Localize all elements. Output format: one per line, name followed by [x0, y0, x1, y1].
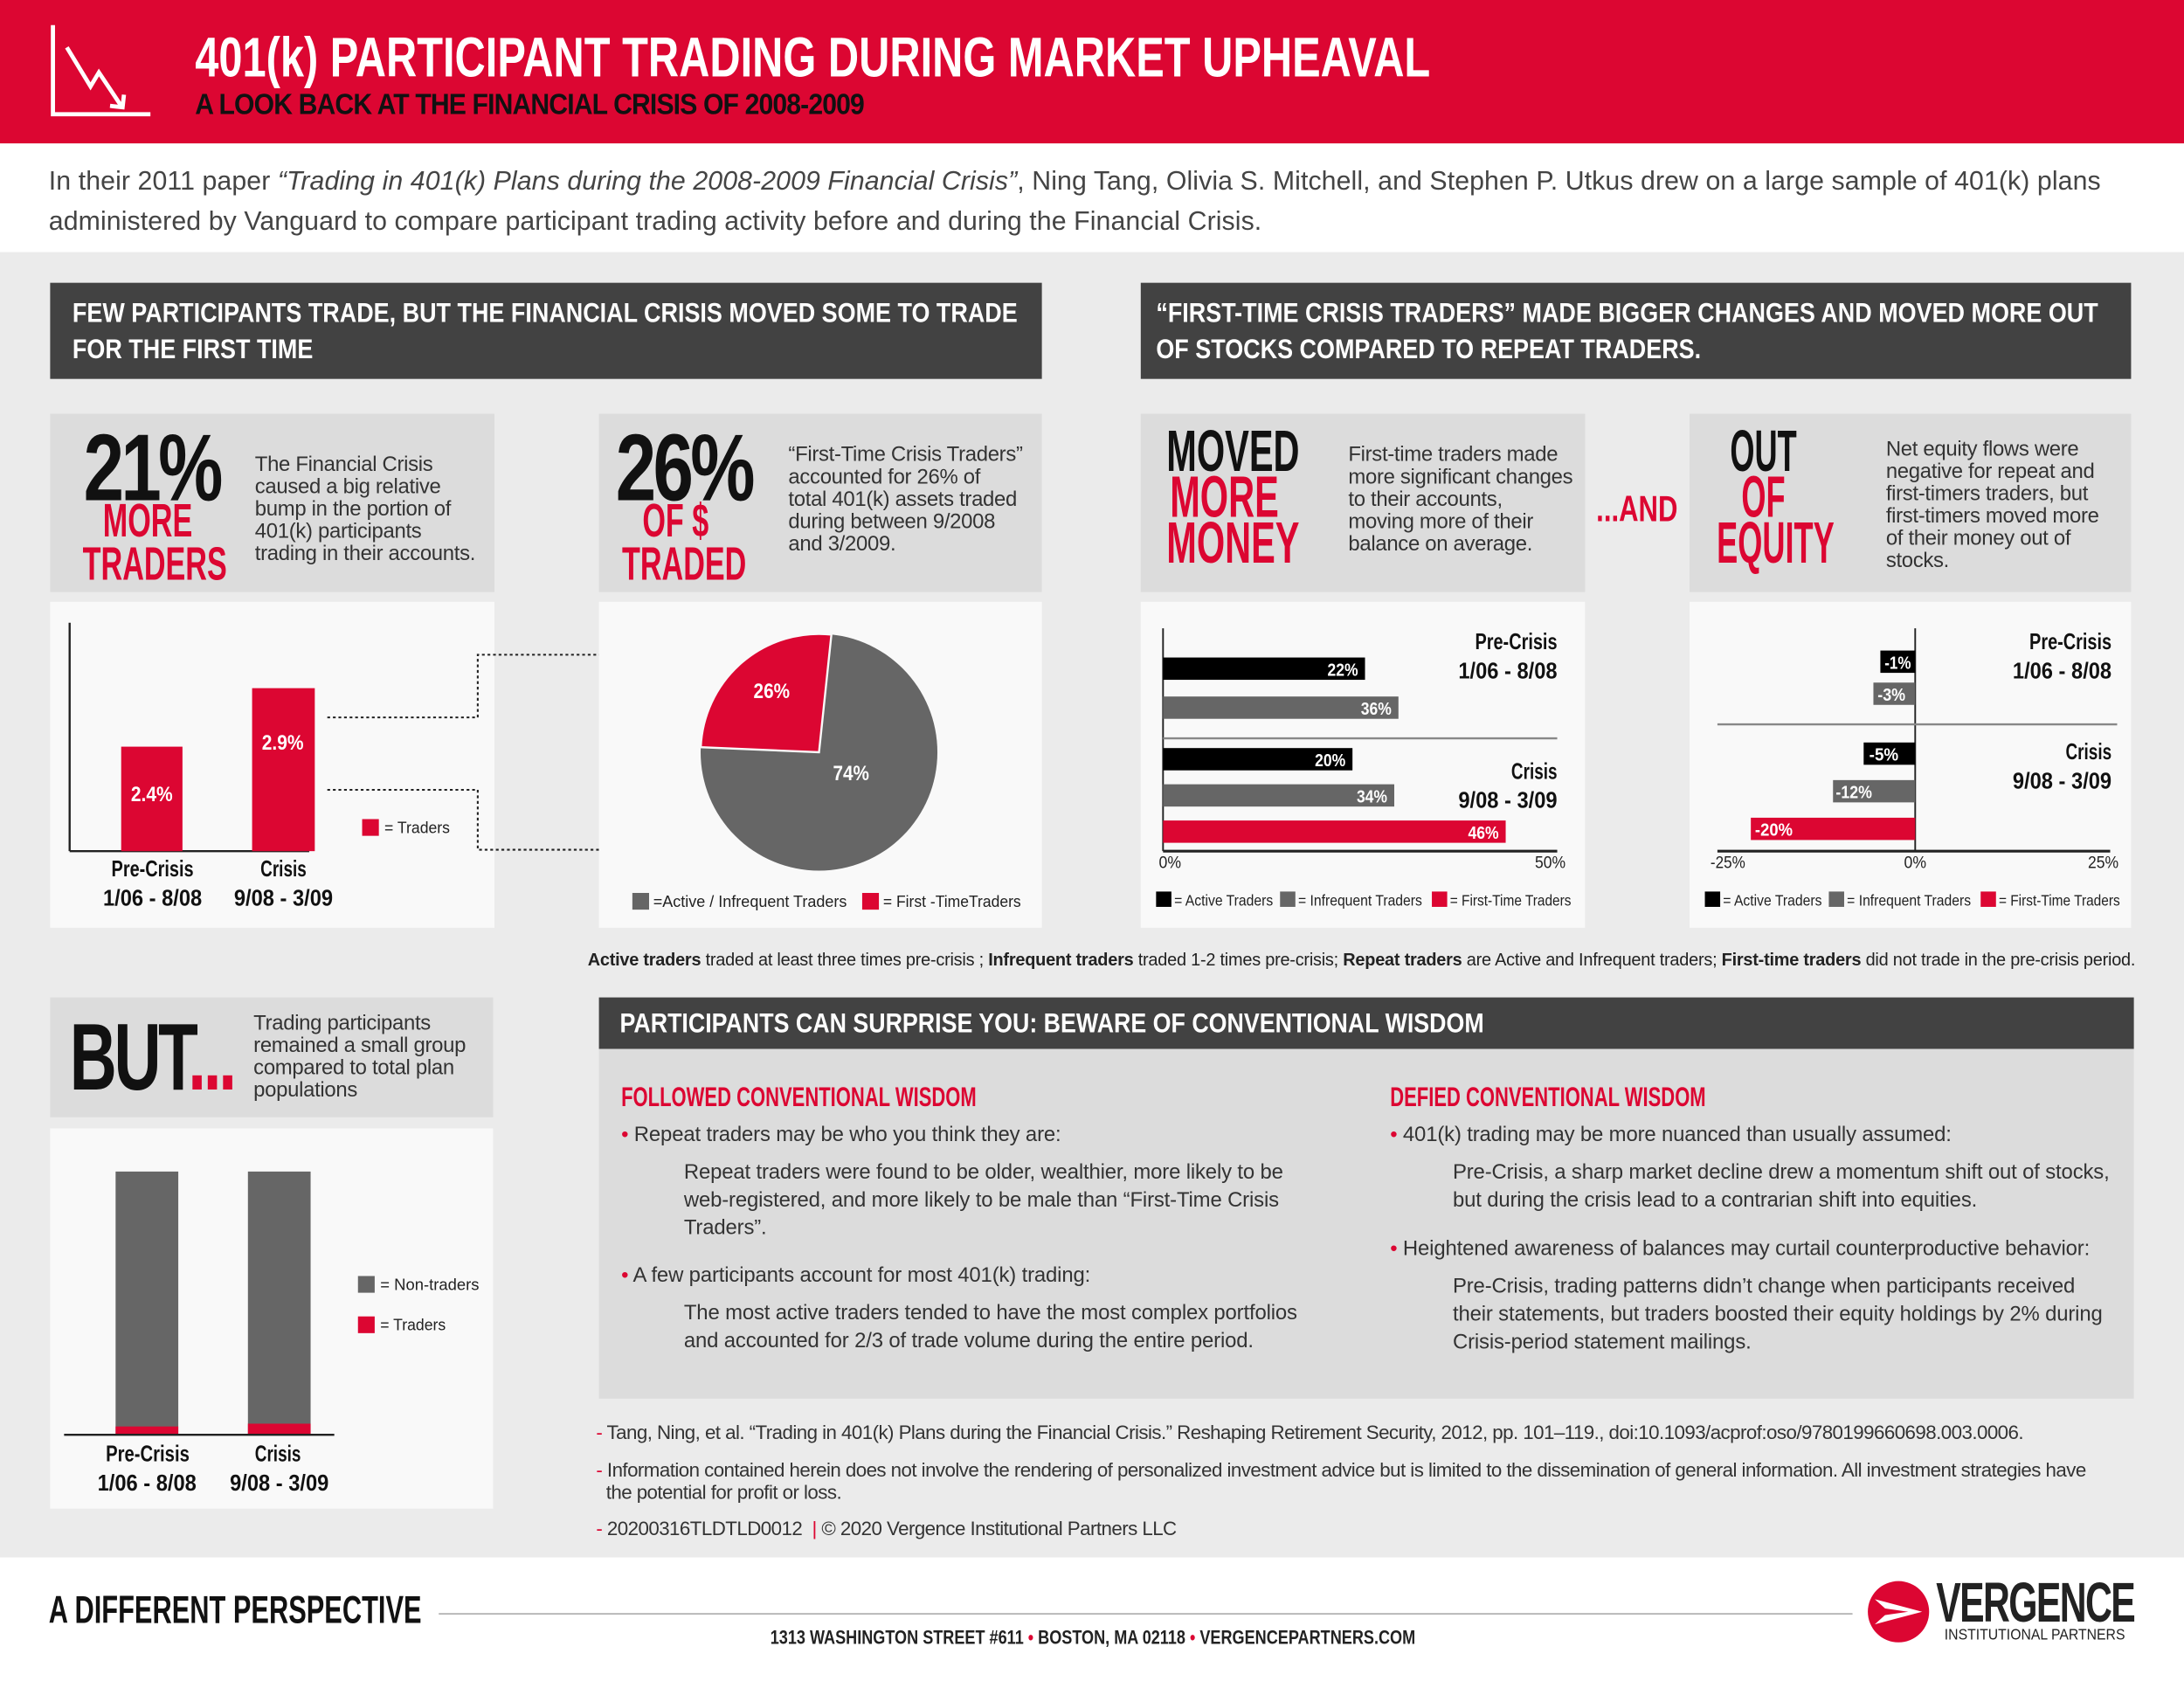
chart: traders vs non-traders: = Traders — [380, 1316, 446, 1334]
stat box: moved more money: moving more of their — [1348, 510, 1533, 534]
footnotes — [596, 1421, 2086, 1539]
column: followed conventional wisdom: Repeat traders were found to be older, wealthier, more likely to be — [684, 1160, 1283, 1184]
chart: moved more money horizontal bars: 36% — [1361, 699, 1392, 719]
intro text: In their 2011 paper “Trading in 401(k) Plans during the 2008-2009 Financial Crisis”, Ning Tang, Olivia S. Mitchell, and Stephen P. Utkus drew on a large sample of 401(k) plans — [49, 167, 2101, 197]
chart: pie of $ traded: 74% — [833, 762, 869, 785]
stat box: out of equity: first-timers moved more — [1886, 504, 2099, 528]
column: defied conventional wisdom: but during the crisis lead to a contrarian shift into equities. — [1453, 1188, 1977, 1212]
column: followed conventional wisdom: Traders”. — [684, 1216, 767, 1240]
chart: out of equity diverging bars: = Active Traders — [1723, 891, 1822, 909]
chart: pie of $ traded — [599, 602, 1042, 928]
section header left: FOR THE FIRST TIME — [73, 335, 313, 365]
stat box: 26% of $ traded: total 401(k) assets traded — [788, 488, 1017, 511]
chart: moved more money horizontal bars: 9/08 - 3/09 — [1458, 789, 1558, 813]
column: defied conventional wisdom: Pre-Crisis, trading patterns didn’t change when participants received — [1453, 1275, 2075, 1298]
header banner — [0, 0, 2184, 143]
chart: traders bar chart — [50, 602, 494, 928]
chart: traders bar chart: Pre-Crisis — [112, 857, 194, 882]
chart: moved more money horizontal bars: = First-Time Traders — [1450, 891, 1572, 909]
intro text: administered by Vanguard to compare participant trading activity before and during the Financial Crisis. — [49, 208, 1261, 237]
chart: traders bar chart: 1/06 - 8/08 — [103, 886, 202, 910]
subtitle: A LOOK BACK AT THE FINANCIAL CRISIS OF 2008-2009 — [195, 89, 864, 121]
dotted connector lines — [327, 654, 599, 851]
chart: out of equity diverging bars: -25% — [1711, 854, 1745, 872]
chart: moved more money horizontal bars: = Infrequent Traders — [1298, 891, 1422, 909]
chart: traders bar chart: 2.9% — [262, 731, 304, 755]
footnotes: - Information contained herein does not involve the rendering of personalized investment advice but is limited to the dissemination of general information. All investment strategies have — [596, 1458, 2086, 1481]
column: defied conventional wisdom: • Heightened awareness of balances may curtail counterproductive behavior: — [1390, 1237, 2090, 1261]
stat box: out of equity: Net equity flows were — [1886, 438, 2078, 461]
footer — [0, 1558, 2184, 1688]
stat box: 21% more traders: caused a big relative — [255, 475, 440, 499]
chart: out of equity diverging bars: -1% — [1884, 653, 1911, 673]
section header right: OF STOCKS COMPARED TO REPEAT TRADERS. — [1156, 335, 1701, 365]
chart: traders vs non-traders: 9/08 - 3/09 — [230, 1471, 328, 1496]
stat box: 26% of $ traded: TRADED — [622, 537, 746, 591]
stat box: moved more money — [1141, 414, 1585, 592]
stat box: 21% more traders: MORE — [103, 495, 192, 548]
logo: vergence — [1868, 1573, 2135, 1643]
logo: vergence: VERGENCE — [1936, 1573, 2134, 1634]
column: followed conventional wisdom: The most active traders tended to have the most complex portfolios — [684, 1301, 1297, 1325]
logo: vergence: INSTITUTIONAL PARTNERS — [1945, 1627, 2125, 1643]
section header right — [1141, 283, 2131, 379]
stat box: moved more money: MORE — [1170, 464, 1279, 529]
stat box: 26% of $ traded — [599, 414, 1042, 592]
column: followed conventional wisdom: web-registered, and more likely to be male than “First-Time Crisis — [684, 1188, 1279, 1212]
stat box: but...: populations — [253, 1078, 357, 1102]
column: followed conventional wisdom: and accounted for 2/3 of trade volume during the entire period. — [684, 1329, 1254, 1352]
stat box: out of equity — [1690, 414, 2131, 592]
column: followed conventional wisdom: • Repeat traders may be who you think they are: — [621, 1123, 1061, 1146]
stat box: but...: compared to total plan — [253, 1056, 454, 1080]
chart: moved more money horizontal bars: 34% — [1357, 786, 1387, 806]
chart: pie of $ traded: 26% — [754, 680, 790, 703]
text: ...and: ...AND — [1596, 488, 1677, 529]
chart: traders vs non-traders — [50, 1128, 493, 1509]
stat box: out of equity: negative for repeat and — [1886, 460, 2094, 483]
section header right: “FIRST-TIME CRISIS TRADERS” MADE BIGGER CHANGES AND MOVED MORE OUT — [1156, 298, 2098, 329]
chart: out of equity diverging bars: -3% — [1877, 685, 1905, 705]
stat box: 26% of $ traded: OF $ — [642, 495, 708, 548]
chart: traders bar chart: Crisis — [260, 857, 307, 882]
chart: moved more money horizontal bars: Pre-Crisis — [1475, 630, 1558, 654]
chart: moved more money horizontal bars: 22% — [1327, 660, 1358, 680]
stat box: moved more money: MONEY — [1166, 510, 1299, 575]
chart: out of equity diverging bars: 1/06 - 8/08 — [2013, 659, 2111, 683]
chart: moved more money horizontal bars: 0% — [1159, 854, 1181, 872]
chart: out of equity diverging bars: -20% — [1755, 820, 1793, 841]
stat box: 26% of $ traded: during between 9/2008 — [788, 510, 995, 534]
chart: traders vs non-traders: Pre-Crisis — [106, 1442, 190, 1467]
stat box: out of equity: stocks. — [1886, 549, 1949, 572]
chart: moved more money horizontal bars: 46% — [1468, 823, 1499, 843]
chart: pie of $ traded: = First -TimeTraders — [883, 892, 1021, 910]
stat box: out of equity: OUT — [1730, 418, 1797, 483]
column: defied conventional wisdom: DEFIED CONVENTIONAL WISDOM — [1390, 1083, 1706, 1113]
chart: out of equity diverging bars: = Infrequent Traders — [1847, 891, 1971, 909]
column: defied conventional wisdom: Crisis-period statement mailings. — [1453, 1331, 1752, 1354]
chart: traders vs non-traders: = Non-traders — [380, 1275, 479, 1293]
chart: moved more money horizontal bars: Crisis — [1511, 759, 1558, 784]
definitions note: Active traders traded at least three times pre-crisis ; Infrequent traders traded 1-2 times pre-crisis; Repeat traders are Active and Infrequent traders; First-time traders did not trade in the pre-crisis period. — [588, 950, 2135, 970]
chart: out of equity diverging bars: -5% — [1870, 745, 1898, 765]
section header: conventional wisdom — [599, 998, 2134, 1049]
stat box: out of equity: EQUITY — [1717, 510, 1835, 575]
chart: traders vs non-traders: Crisis — [255, 1442, 301, 1467]
panel: conventional wisdom content — [599, 1049, 2134, 1399]
chart: out of equity diverging bars — [1690, 602, 2131, 928]
chart: out of equity diverging bars: -12% — [1835, 783, 1872, 803]
column: defied conventional wisdom: Pre-Crisis, a sharp market decline drew a momentum shift out of stocks, — [1453, 1160, 2110, 1184]
stat box: but...: Trading participants — [253, 1012, 431, 1035]
stat box: moved more money: to their accounts, — [1348, 488, 1503, 511]
stat box: 21% more traders: TRADERS — [83, 537, 227, 591]
chart: traders bar chart: = Traders — [384, 818, 450, 836]
chart: traders bar chart: 2.4% — [131, 783, 173, 806]
stat box: moved more money: balance on average. — [1348, 532, 1532, 556]
chart: moved more money horizontal bars: 20% — [1315, 751, 1345, 771]
chart: out of equity diverging bars: 25% — [2088, 854, 2118, 872]
stat box: 21% more traders: trading in their accounts. — [255, 542, 475, 565]
stat box: out of equity: of their money out of — [1886, 527, 2070, 550]
stat box: out of equity: first-timers traders, but — [1886, 482, 2088, 506]
icon: declining chart — [51, 24, 150, 117]
column: followed conventional wisdom: • A few participants account for most 401(k) trading: — [621, 1263, 1090, 1287]
tagline: A DIFFERENT PERSPECTIVE — [49, 1588, 422, 1631]
stat box: moved more money: First-time traders made — [1348, 443, 1558, 467]
chart: out of equity diverging bars: Crisis — [2065, 740, 2111, 764]
footnotes: - Tang, Ning, et al. “Trading in 401(k) Plans during the Financial Crisis.” Reshaping Retirement Security, 2012, pp. 101–119., doi:10.1093/acprof:oso/9780199660698.003.0006. — [596, 1421, 2023, 1443]
chart: traders vs non-traders: 1/06 - 8/08 — [98, 1471, 197, 1496]
column: defied conventional wisdom: their statements, but traders boosted their equity holdings by 2% during — [1453, 1303, 2103, 1326]
address: 1313 WASHINGTON STREET #611 • BOSTON, MA 02118 • VERGENCEPARTNERS.COM — [771, 1626, 1415, 1648]
stat box: but...: remained a small group — [253, 1034, 466, 1057]
chart: moved more money horizontal bars: 1/06 - 8/08 — [1458, 659, 1558, 683]
column: defied conventional wisdom: • 401(k) trading may be more nuanced than usually assumed: — [1390, 1123, 1952, 1146]
stat box: 21% more traders — [50, 414, 494, 592]
stat box: 21% more traders: 21% — [84, 415, 220, 521]
stat box: but... — [50, 998, 493, 1117]
chart: out of equity diverging bars: 9/08 - 3/09 — [2013, 769, 2111, 793]
chart: out of equity diverging bars: 0% — [1904, 854, 1926, 872]
stat box: moved more money: more significant changes — [1348, 466, 1572, 489]
section header left: FEW PARTICIPANTS TRADE, BUT THE FINANCIAL CRISIS MOVED SOME TO TRADE — [73, 298, 1018, 329]
chart: traders bar chart: 9/08 - 3/09 — [234, 886, 333, 910]
footnotes: - 20200316TLDTLD0012 | © 2020 Vergence Institutional Partners LLC — [596, 1517, 1177, 1539]
stat box: moved more money: MOVED — [1166, 418, 1299, 483]
chart: moved more money horizontal bars: = Active Traders — [1174, 891, 1273, 909]
stat box: but...: BUT... — [70, 1005, 234, 1110]
column: followed conventional wisdom: FOLLOWED CONVENTIONAL WISDOM — [621, 1083, 977, 1113]
intro text — [0, 143, 2184, 253]
title: 401(k) PARTICIPANT TRADING DURING MARKET UPHEAVAL — [195, 28, 1430, 89]
chart: pie of $ traded: =Active / Infrequent Traders — [653, 892, 847, 910]
stat box: 26% of $ traded: accounted for 26% of — [788, 466, 980, 489]
stat box: 26% of $ traded: “First-Time Crisis Traders” — [788, 443, 1023, 467]
section header left — [50, 283, 1042, 379]
section header: conventional wisdom: PARTICIPANTS CAN SURPRISE YOU: BEWARE OF CONVENTIONAL WISDOM — [620, 1008, 1484, 1039]
footnotes: the potential for profit or loss. — [606, 1481, 841, 1503]
column: defied conventional wisdom — [1390, 1083, 2110, 1354]
stat box: 21% more traders: bump in the portion of — [255, 497, 451, 521]
stat box: out of equity: OF — [1741, 464, 1786, 529]
stat box: 26% of $ traded: and 3/2009. — [788, 532, 895, 556]
stat box: 26% of $ traded: 26% — [616, 415, 752, 521]
chart: moved more money horizontal bars — [1141, 602, 1585, 928]
column: followed conventional wisdom — [621, 1083, 1297, 1352]
stat box: 21% more traders: The Financial Crisis — [255, 453, 432, 476]
chart: moved more money horizontal bars: 50% — [1535, 854, 1565, 872]
stat box: 21% more traders: 401(k) participants — [255, 520, 421, 543]
